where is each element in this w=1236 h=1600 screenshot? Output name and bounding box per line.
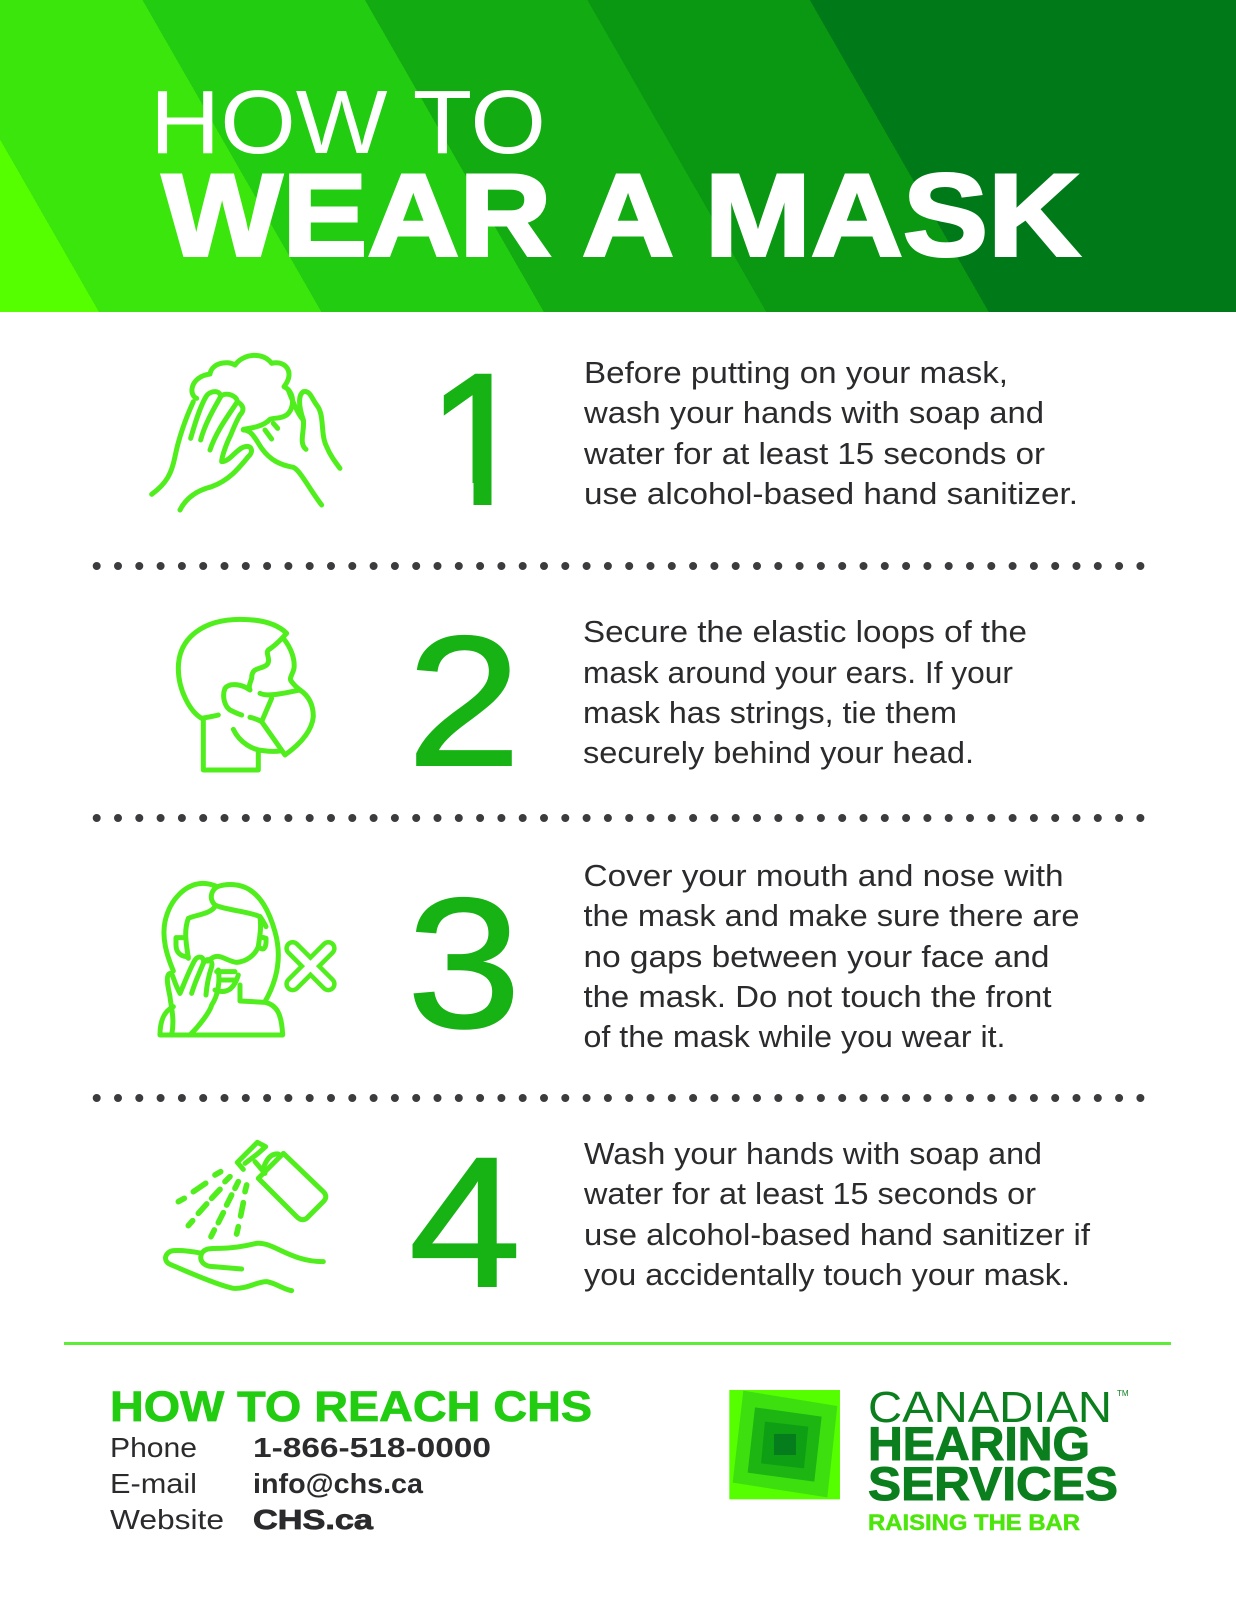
logo wordmark: canadian: CANADIAN [868, 1383, 1112, 1432]
number 4: 4 [409, 1120, 521, 1326]
title: how to: HOW TO [150, 73, 546, 173]
text: step 1: wash your hands with soap and [583, 395, 1044, 430]
logo tagline: RAISING THE BAR [868, 1510, 1080, 1535]
number 2: 2 [407, 599, 521, 805]
text: step 2 [583, 614, 1027, 770]
text: step 3: Cover your mouth and nose with [584, 858, 1064, 893]
heading: how to reach CHS: HOW TO REACH CHS [110, 1383, 592, 1431]
number 1: 1 [428, 337, 531, 543]
text: step 3: the mask and make sure there are [584, 898, 1080, 933]
text: step 4: Wash your hands with soap and [584, 1136, 1042, 1171]
text: step 3 [584, 858, 1080, 1054]
contact: website address: CHS.ca [253, 1504, 374, 1535]
panel: step 1 [149, 352, 1075, 512]
text: step 4: you accidentally touch your mask. [584, 1257, 1070, 1292]
icon: head in profile with mask [178, 619, 313, 770]
contact: phone label: Phone [110, 1432, 197, 1463]
text: step 1: water for at least 15 seconds or [583, 436, 1045, 471]
panel: step 3 [160, 858, 1080, 1067]
text: step 2: securely behind your head. [583, 735, 974, 770]
text: step 3: no gaps between your face and [584, 939, 1050, 974]
text: step 2: Secure the elastic loops of the [583, 614, 1027, 649]
contact: phone number: 1-866-518-0000 [253, 1432, 491, 1463]
logo: Canadian Hearing Services [729, 1383, 1129, 1535]
title: wear a mask: WEAR A MASK [162, 150, 1080, 280]
text: step 2: mask has strings, tie them [583, 695, 957, 730]
text: step 3: the mask. Do not touch the front [584, 979, 1052, 1014]
text: step 4: use alcohol-based hand sanitizer if [584, 1217, 1090, 1252]
text: step 4 [583, 1136, 1090, 1292]
text: step 1: Before putting on your mask, [584, 355, 1008, 390]
text: step 3: of the mask while you wear it. [584, 1019, 1006, 1054]
panel: step 4 [165, 1120, 1090, 1326]
logo wordmark: services: SERVICES [868, 1457, 1118, 1510]
panel: step 2 [178, 599, 1027, 805]
icon: woman touching mask with cross [160, 883, 328, 1035]
logo wordmark: hearing: HEARING [868, 1417, 1090, 1470]
icon: washing hands with soap [152, 355, 340, 510]
logo mark: nested squares [729, 1390, 840, 1499]
logo trademark: TM [1117, 1389, 1129, 1398]
contact: website label: Website [110, 1504, 224, 1535]
text: step 1 [583, 355, 1078, 511]
panel: contact details [110, 1383, 592, 1535]
text: step 1: use alcohol-based hand sanitizer. [584, 476, 1078, 511]
contact: e-mail address: info@chs.ca [253, 1468, 423, 1499]
number 3: 3 [407, 861, 521, 1067]
text: step 2: mask around your ears. If your [583, 655, 1013, 690]
contact: e-mail label: E-mail [110, 1468, 197, 1499]
text: step 4: water for at least 15 seconds or [583, 1176, 1036, 1211]
icon: sanitizer spray over hand [165, 1142, 326, 1291]
header banner [0, 0, 1236, 312]
